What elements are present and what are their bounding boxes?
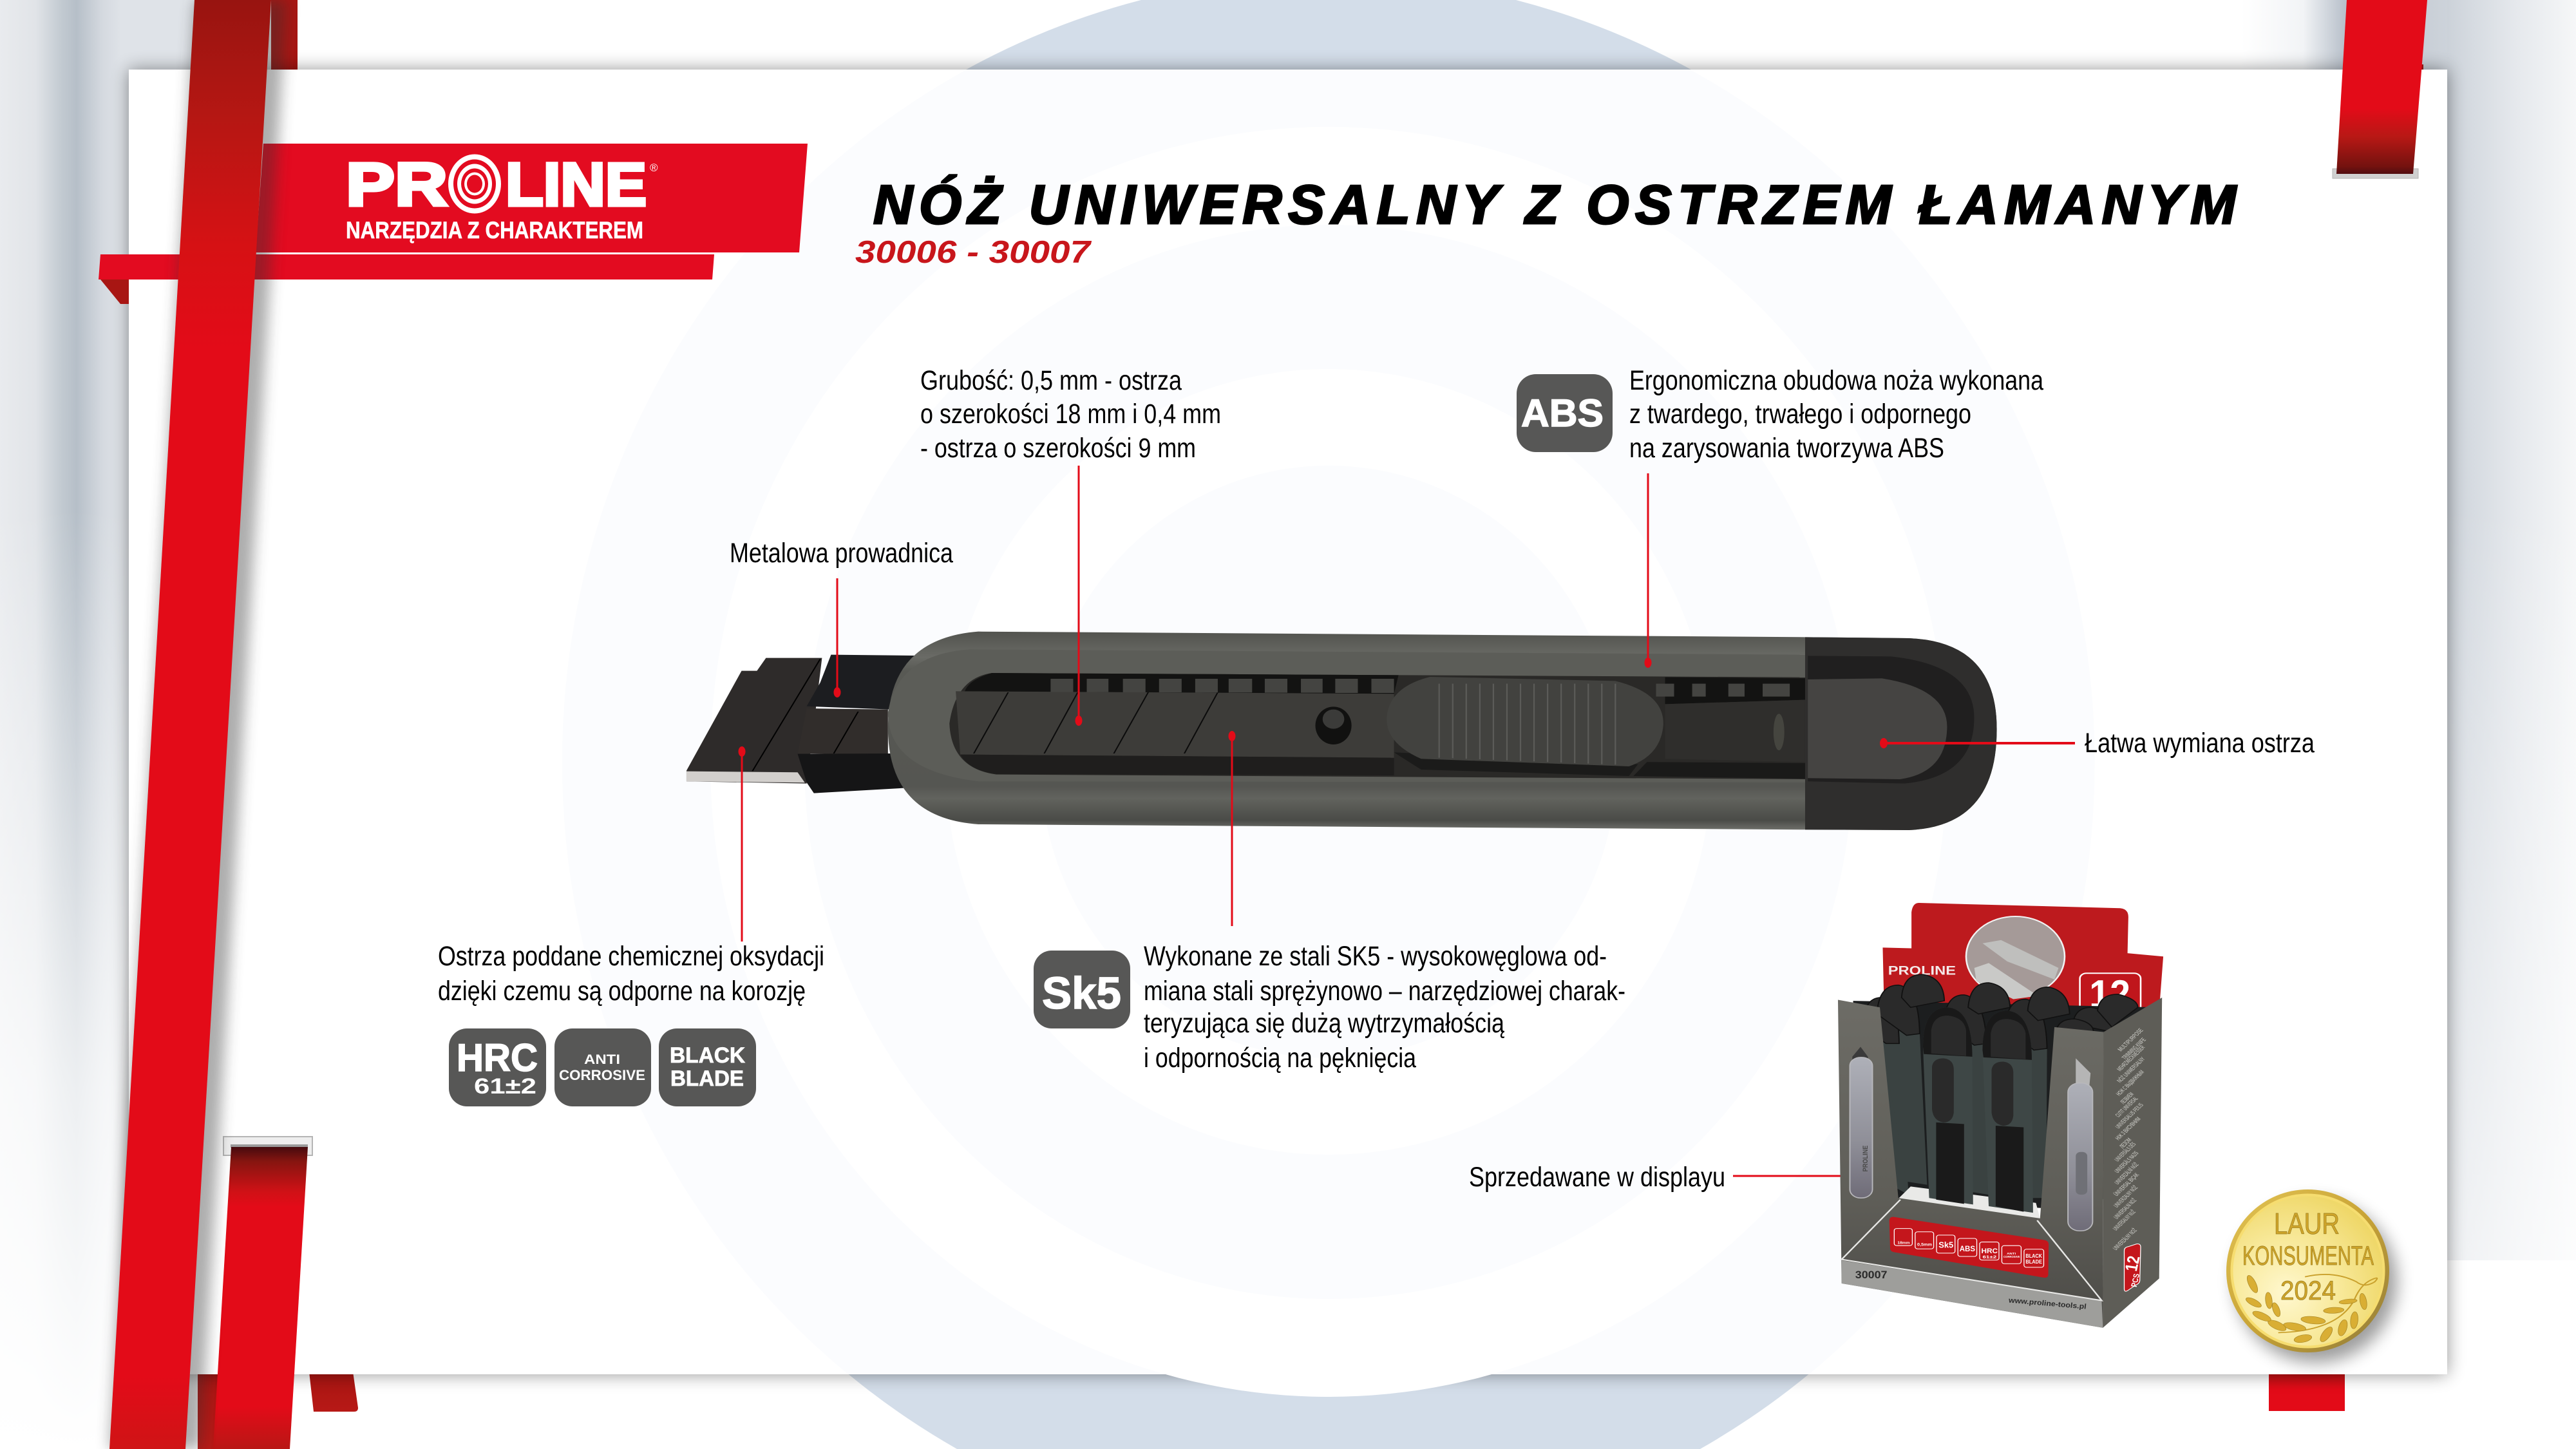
logo wordmark: PR: [346, 151, 448, 219]
multilingual side text: НІЖ З ВИСУВНИМ: [2114, 1116, 2143, 1142]
box code and website: www.proline-tools.pl: [2007, 1296, 2087, 1311]
front knife right: [1982, 1010, 2033, 1213]
knife illustration: [687, 632, 1997, 830]
text: thickness: o szerokości 18 mm i 0,4 mm: [920, 399, 1221, 430]
red feature label: Sk5: [1938, 1240, 1953, 1250]
Sk5 badge: [1034, 951, 1130, 1028]
big ribbon left: [109, 0, 271, 1449]
12 pcs red tag: [2122, 1244, 2144, 1291]
medal disc: [2226, 1189, 2389, 1352]
multilingual side text: [2112, 1027, 2148, 1252]
badge: HRC: 61±2: [474, 1074, 536, 1099]
12 pcs red tag: PCS: [2130, 1273, 2142, 1287]
multilingual side text: NÓŻ UNIWERSALNY: [2116, 1056, 2147, 1084]
product display box: [1838, 903, 2163, 1328]
Sk5 text: teryzująca się dużą wytrzymałością: [1144, 1008, 1504, 1039]
Sk5 text: miana stali sprężynowo – narzędziowej charak-: [1144, 976, 1625, 1007]
ABS badge: ABS: [1521, 392, 1604, 435]
leader: display: [1733, 1171, 1859, 1180]
text: thickness: Grubość: 0,5 mm - ostrza: [920, 365, 1182, 396]
medal text: LAUR: [2274, 1207, 2340, 1240]
multilingual side text: НОЖ С ВЫДВИЖНЫМ: [2115, 1069, 2146, 1097]
badge: HRC: [449, 1028, 546, 1106]
blade: [687, 658, 822, 784]
pivot screw: [1316, 706, 1352, 744]
text: thickness: [920, 365, 1221, 464]
Sk5 text: Wykonane ze stali SK5 - wysokowęglowa od-: [1144, 941, 1607, 972]
upper metal guide: [807, 655, 915, 710]
rail teeth: [1050, 679, 1394, 693]
multilingual side text: MULTIPURPOSE: [2117, 1027, 2145, 1053]
window knife left: PROLINE: [1862, 1146, 1870, 1171]
ABS text: na zarysowania tworzywa ABS: [1629, 433, 1944, 464]
window knife left: [1850, 1047, 1873, 1198]
display back header: 12: [2089, 972, 2130, 1016]
multilingual side text: UNIVERSALNI NOŽ: [2112, 1198, 2138, 1220]
red feature label: BLACK: [2025, 1253, 2042, 1259]
badge: HRC: HRC: [457, 1036, 538, 1079]
product codes: 30006 - 30007: [855, 235, 1092, 270]
front knife left: [1923, 1007, 1973, 1204]
box front and side: [1838, 998, 2162, 1328]
ABS text: Ergonomiczna obudowa noża wykonana: [1629, 365, 2043, 396]
12 pcs red tag: 12: [2122, 1255, 2144, 1273]
multilingual side text: ЛЕЗОМ: [2118, 1137, 2134, 1150]
multilingual side text: MEHRZWECKMESSER: [2116, 1045, 2147, 1072]
box code and website: [1855, 1269, 2087, 1311]
badge: anti corrosive: ANTI: [584, 1052, 620, 1067]
background blue ellipse: [562, 0, 2095, 1449]
badge: black blade: BLACK: [670, 1043, 745, 1068]
multilingual side text: UNIVERZALNY NÔŽ: [2112, 1185, 2139, 1209]
oxidised text: [438, 941, 824, 1007]
box code and website: 30007: [1855, 1269, 1887, 1281]
banner fold: [100, 279, 129, 304]
multilingual side text: UNIVERSĀLS DĒS: [2114, 1141, 2138, 1163]
Sk5 text: i odpornością na pęknięcia: [1144, 1043, 1416, 1074]
banner lower bar: [99, 254, 714, 279]
ABS badge: [1517, 374, 1613, 452]
medal text: 2024: [2280, 1275, 2336, 1305]
multilingual side text: CUTIT UNIVERSAL: [2114, 1095, 2140, 1119]
multilingual side text: ÜNIVERSAL BIÇAK: [2112, 1172, 2141, 1197]
leader: thickness: [1075, 466, 1082, 726]
display back header: [1882, 903, 2163, 1016]
callout: SK5: [1034, 941, 1625, 1074]
medal text: [2242, 1207, 2374, 1305]
text: thickness: - ostrza o szerokości 9 mm: [920, 433, 1196, 464]
red feature label: 61±2: [1982, 1255, 1996, 1260]
multilingual side text: UNIVERZÁLNÍ NŮŽ: [2113, 1161, 2141, 1186]
slider: [1394, 752, 1638, 776]
text: metal guide: Metalowa prowadnica: [730, 538, 953, 569]
logo wordmark: ®: [650, 162, 658, 174]
red feature label: 0,5mm: [1917, 1243, 1932, 1247]
red feature label: CORROSIVE: [2003, 1256, 2020, 1258]
leader: ABS: [1645, 473, 1651, 668]
badge: anti corrosive: [554, 1028, 651, 1106]
badge: anti corrosive: CORROSIVE: [559, 1067, 645, 1083]
multilingual side text: TRIMMING KNIFE: [2121, 1037, 2148, 1061]
leader: blade replacement: [1880, 738, 2075, 748]
medal shadow: [2235, 1200, 2397, 1363]
oxidised text: Ostrza poddane chemicznej oksydacji: [438, 941, 824, 972]
red feature label: HRC: [1982, 1247, 1998, 1255]
text: blade replacement: Łatwa wymiana ostrza: [2085, 728, 2315, 759]
display back header: PROLINE: [1888, 963, 1956, 978]
title: NÓŻ UNIWERSALNY Z OSTRZEM ŁAMANYM: [873, 175, 2237, 236]
multilingual side text: UNIVERSALUS PEILIS: [2114, 1102, 2145, 1130]
medal text: KONSUMENTA: [2242, 1240, 2374, 1271]
red feature label: ABS: [1960, 1244, 1975, 1253]
multilingual side text: UNIVERZÁLNY NOŽ: [2112, 1227, 2139, 1252]
red feature label: ANTI: [2007, 1252, 2016, 1255]
logo wordmark: LINE: [506, 151, 647, 219]
right slot: [1665, 677, 1805, 704]
logo wordmark: [346, 151, 658, 219]
ribbon top-right: [2333, 0, 2427, 178]
panel concentric rings: [562, 70, 2095, 1397]
red feature label: [1889, 1217, 2049, 1278]
blade slot: [949, 673, 1805, 779]
text: display: Sprzedawane w displayu: [1469, 1162, 1725, 1193]
badge: black blade: [659, 1028, 756, 1106]
callout: ABS: [1517, 365, 2043, 464]
Sk5 badge: Sk5: [1042, 968, 1121, 1018]
ribbon shadow: [109, 0, 287, 1449]
red feature label: 18mm: [1897, 1241, 1910, 1245]
badge: black blade: BLADE: [670, 1066, 744, 1091]
banner main: [256, 144, 808, 252]
red feature label: BLADE: [2025, 1259, 2042, 1265]
lower metal guide: [798, 753, 915, 793]
logo banner: [99, 144, 808, 304]
multilingual side text: ЛЕЗВИЕМ: [2119, 1092, 2136, 1105]
multilingual side text: UNIVERSĀLS NAZIS: [2114, 1150, 2141, 1175]
multilingual side text: UNIVERSALNY NUŽ: [2112, 1209, 2137, 1232]
oxidised text: dzięki czemu są odporne na korozję: [438, 976, 806, 1007]
end cap: [1805, 637, 1997, 830]
ABS text: [1629, 365, 2043, 464]
leader: oxidised blades: [738, 746, 746, 942]
leader: SK5 steel: [1229, 731, 1235, 926]
ABS text: z twardego, trwałego i odpornego: [1629, 399, 1971, 430]
callout: oxidised blades: [438, 941, 824, 1106]
leader: metal guide: [833, 578, 841, 697]
gold medal: [2226, 1189, 2397, 1363]
window knife right: [2068, 1058, 2092, 1231]
handle body: [888, 632, 1997, 830]
knives in back rows: [1853, 974, 2159, 1218]
small ribbon bottom-left: [213, 1137, 312, 1449]
Sk5 text: [1144, 941, 1625, 1074]
medal laurel: [2244, 1274, 2377, 1344]
logo tagline: NARZĘDZIA Z CHARAKTEREM: [346, 217, 643, 243]
